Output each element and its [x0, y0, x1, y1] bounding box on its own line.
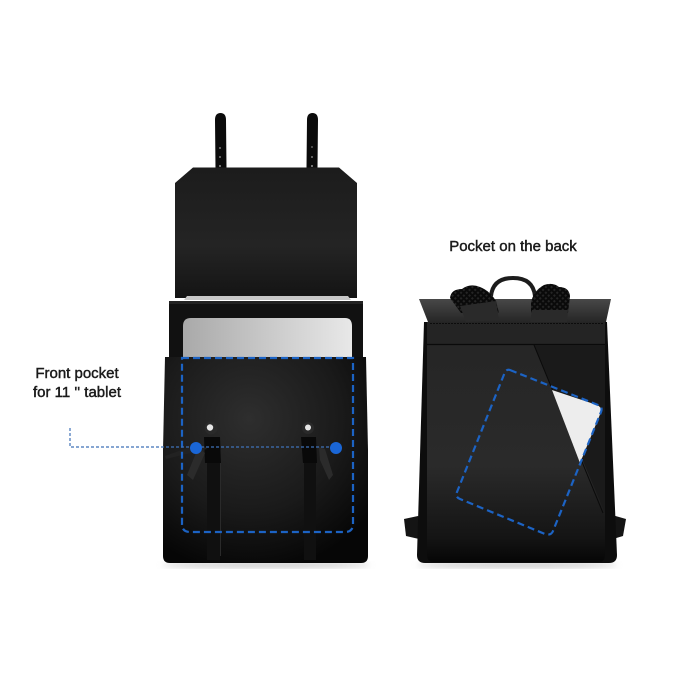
- laptop top edge: [184, 296, 351, 300]
- front pocket strap: left: [165, 422, 221, 560]
- shoulder straps: [450, 284, 570, 322]
- label: front pocket: for 11 '' tablet: [33, 384, 122, 401]
- front backpack: [162, 113, 370, 568]
- front pocket strap: right: [301, 422, 333, 560]
- dashed outline: back tablet pocket: [456, 370, 602, 535]
- tablet peek: [552, 390, 601, 463]
- body: [417, 322, 617, 563]
- pocket flap right side: [534, 345, 605, 513]
- back backpack: [404, 278, 626, 568]
- pointer line and dots: [70, 428, 342, 454]
- label: front pocket: [33, 365, 122, 401]
- label: front pocket: Front pocket: [35, 365, 120, 382]
- main compartment: [169, 301, 363, 360]
- side straps: [404, 515, 626, 539]
- dashed outline: front tablet pocket: [182, 358, 353, 532]
- straps above the flap: [215, 113, 318, 168]
- top handle: [491, 278, 535, 296]
- seam band: [427, 322, 605, 345]
- laptop screen: [183, 318, 352, 357]
- open flap: [175, 168, 357, 298]
- front pocket body: [163, 357, 368, 563]
- flap: [419, 299, 611, 322]
- label: pocket on the back: Pocket on the back: [449, 238, 577, 255]
